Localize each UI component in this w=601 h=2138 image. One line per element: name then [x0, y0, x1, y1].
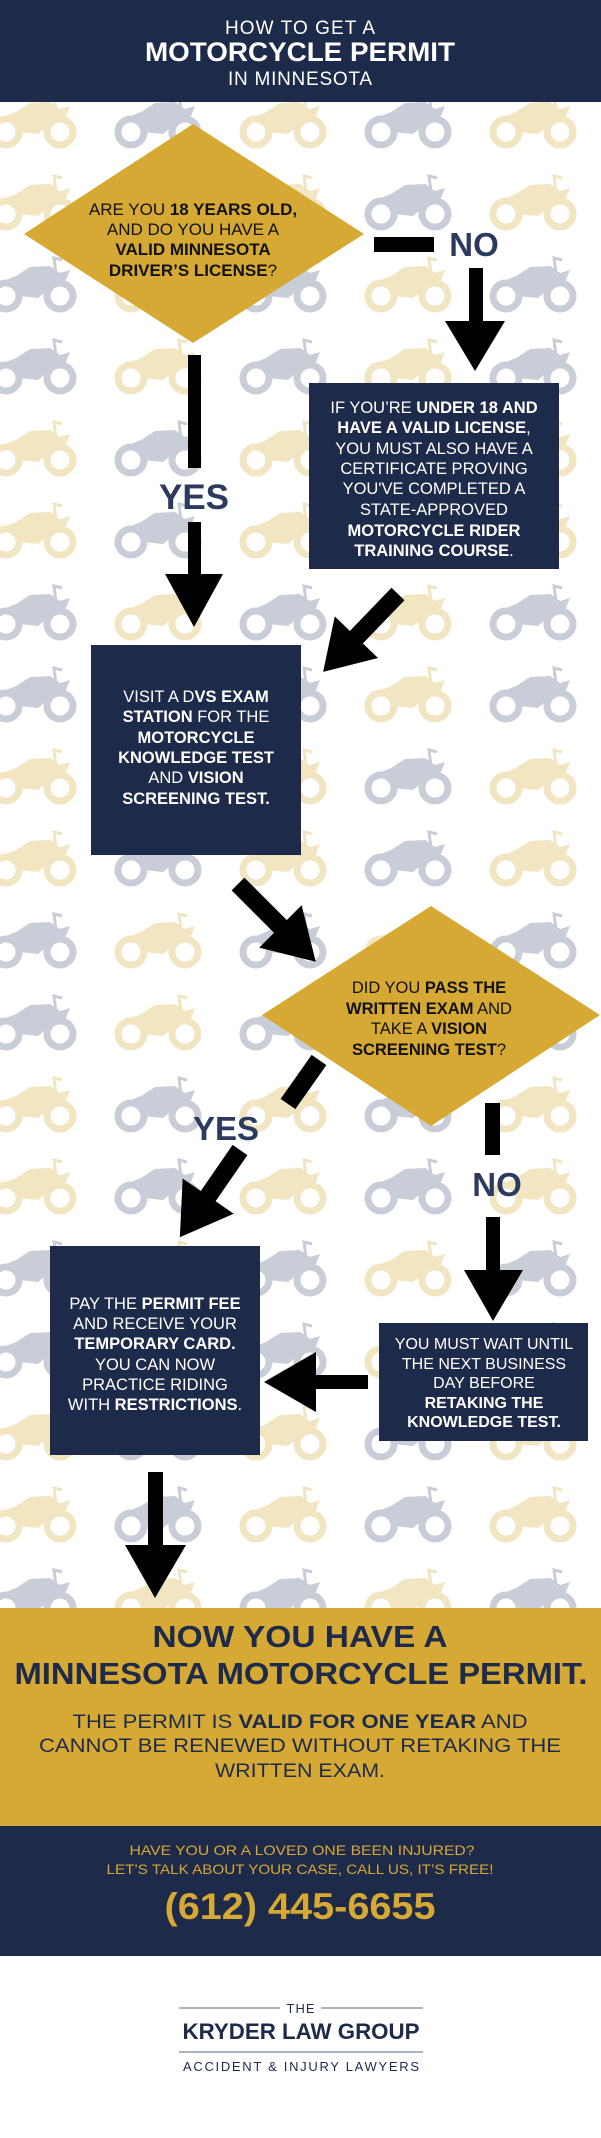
arrow: box to DVS	[301, 573, 420, 693]
arrow: DVS to exam question	[217, 863, 337, 983]
diamond: exam question	[262, 906, 600, 1126]
box: pay permit fee: AND RECEIVE YOUR	[73, 1315, 237, 1333]
arrow: wait to pay	[264, 1352, 368, 1412]
call to action panel: LET’S TALK ABOUT YOUR CASE, CALL US, IT’S FREE!	[106, 1861, 494, 1877]
box: under 18 requirement: STATE-APPROVED	[360, 501, 508, 519]
header: MOTORCYCLE PERMIT	[145, 37, 456, 67]
result panel: NOW YOU HAVE A	[152, 1619, 448, 1654]
box: wait until next business day: YOU MUST WAIT UNTIL	[395, 1336, 573, 1353]
box: wait until next business day: DAY BEFORE	[433, 1375, 535, 1392]
diamond: exam question: SCREENING TEST?	[352, 1041, 506, 1059]
result panel: WRITTEN EXAM.	[215, 1761, 385, 1782]
diamond: exam question: WRITTEN EXAM AND	[346, 1000, 512, 1018]
box: wait until next business day: KNOWLEDGE TEST.	[407, 1414, 561, 1431]
box: visit DVS: SCREENING TEST.	[122, 790, 270, 808]
arrow: down to result	[125, 1472, 186, 1598]
box: under 18 requirement: CERTIFICATE PROVING	[340, 460, 528, 478]
box: visit DVS: VISIT A DVS EXAM	[123, 688, 269, 706]
box: visit DVS: MOTORCYCLE	[137, 729, 255, 747]
box: pay permit fee: YOU CAN NOW	[95, 1356, 215, 1374]
header: HOW TO GET A	[225, 18, 375, 39]
result panel: THE PERMIT IS VALID FOR ONE YEAR AND	[72, 1712, 528, 1733]
box: visit DVS: KNOWLEDGE TEST	[118, 749, 274, 767]
call to action panel: (612) 445-6655	[164, 1886, 436, 1927]
box: pay permit fee: TEMPORARY CARD.	[74, 1335, 236, 1353]
diamond: age question	[24, 124, 364, 343]
box: pay permit fee: PAY THE PERMIT FEE	[69, 1295, 241, 1313]
logo: THE	[286, 2001, 316, 2016]
box: under 18 requirement: MOTORCYCLE RIDER	[348, 522, 521, 540]
box: under 18 requirement	[309, 383, 559, 569]
arrow: NO branch: NO	[449, 226, 499, 263]
box: under 18 requirement: TRAINING COURSE.	[354, 542, 514, 560]
box: under 18 requirement: YOU'VE COMPLETED A	[343, 480, 525, 498]
box: under 18 requirement: YOU MUST ALSO HAVE A	[335, 440, 533, 458]
box: visit DVS: AND VISION	[148, 769, 244, 787]
diamond: exam question: TAKE A VISION	[371, 1020, 487, 1038]
arrow: NO branch	[374, 226, 505, 371]
arrow: YES branch	[159, 355, 229, 627]
diamond: exam question: DID YOU PASS THE	[352, 979, 506, 997]
header	[0, 0, 601, 102]
box: pay permit fee: PRACTICE RIDING	[82, 1376, 228, 1394]
call to action panel	[0, 1826, 601, 1956]
box: under 18 requirement: IF YOU’RE UNDER 18 AND	[330, 399, 538, 417]
arrow: YES to permit: YES	[193, 1110, 259, 1147]
diamond: age question: DRIVER’S LICENSE?	[109, 261, 277, 280]
diamond: age question: VALID MINNESOTA	[115, 240, 271, 259]
result panel: MINNESOTA MOTORCYCLE PERMIT.	[14, 1656, 588, 1691]
box: visit DVS	[91, 645, 301, 855]
call to action panel: HAVE YOU OR A LOVED ONE BEEN INJURED?	[130, 1842, 475, 1858]
arrow: NO to wait	[464, 1103, 523, 1321]
box: under 18 requirement: HAVE A VALID LICENSE,	[337, 419, 531, 437]
box: wait until next business day: RETAKING THE	[425, 1395, 544, 1412]
logo	[179, 2001, 423, 2074]
box: pay permit fee: WITH RESTRICTIONS.	[68, 1396, 242, 1414]
arrow: YES branch: YES	[159, 478, 229, 517]
result panel: CANNOT BE RENEWED WITHOUT RETAKING THE	[39, 1736, 561, 1757]
logo: ACCIDENT & INJURY LAWYERS	[183, 2059, 419, 2074]
diamond: age question: ARE YOU 18 YEARS OLD,	[89, 200, 297, 219]
box: wait until next business day	[379, 1323, 588, 1441]
arrow: NO to wait: NO	[472, 1166, 522, 1203]
diamond: age question: AND DO YOU HAVE A	[107, 220, 280, 239]
box: wait until next business day: THE NEXT BUSINESS	[402, 1356, 566, 1373]
header: IN MINNESOTA	[228, 69, 372, 90]
box: visit DVS: STATION FOR THE	[123, 708, 269, 726]
logo: KRYDER LAW GROUP	[182, 2019, 420, 2044]
box: pay permit fee	[50, 1246, 260, 1455]
arrow: YES to permit	[154, 1060, 319, 1255]
result panel	[0, 1608, 601, 1826]
